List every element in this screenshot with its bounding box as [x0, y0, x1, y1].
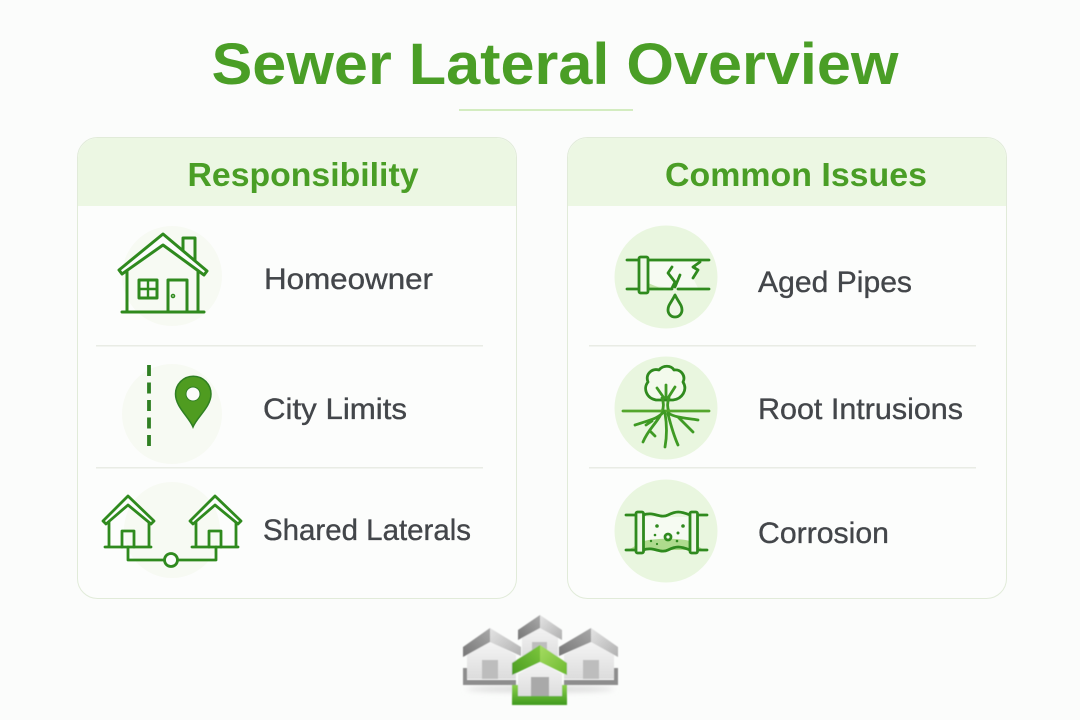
icon: house — [119, 226, 222, 326]
front green house — [512, 645, 567, 705]
label: corrosion: Corrosion — [758, 517, 889, 550]
label: shared laterals: Shared Laterals — [263, 514, 471, 547]
label: root intrusions: Root Intrusions — [758, 393, 963, 426]
label: aged pipes: Aged Pipes — [758, 266, 912, 299]
label: homeowner: Homeowner — [264, 263, 433, 296]
right house — [559, 628, 618, 685]
icon: group of houses — [463, 615, 618, 705]
heading: common issues: Common Issues — [665, 156, 927, 193]
icon: cracked pipe — [614, 226, 718, 328]
icon: tree roots — [614, 356, 718, 460]
panel heading band: common issues — [568, 138, 1006, 206]
back house — [518, 615, 562, 660]
icon: boundary line and pin — [122, 364, 222, 464]
icon: corroded pipe — [614, 480, 718, 582]
icon: two connected houses — [103, 482, 241, 578]
label: city limits: City Limits — [263, 393, 407, 426]
left house — [463, 628, 521, 685]
panel heading band: responsibility — [78, 138, 516, 206]
heading: responsibility: Responsibility — [188, 156, 419, 193]
panel: common issues — [568, 138, 1006, 598]
title: Sewer Lateral Overview — [212, 32, 899, 97]
panel: responsibility — [78, 138, 516, 598]
